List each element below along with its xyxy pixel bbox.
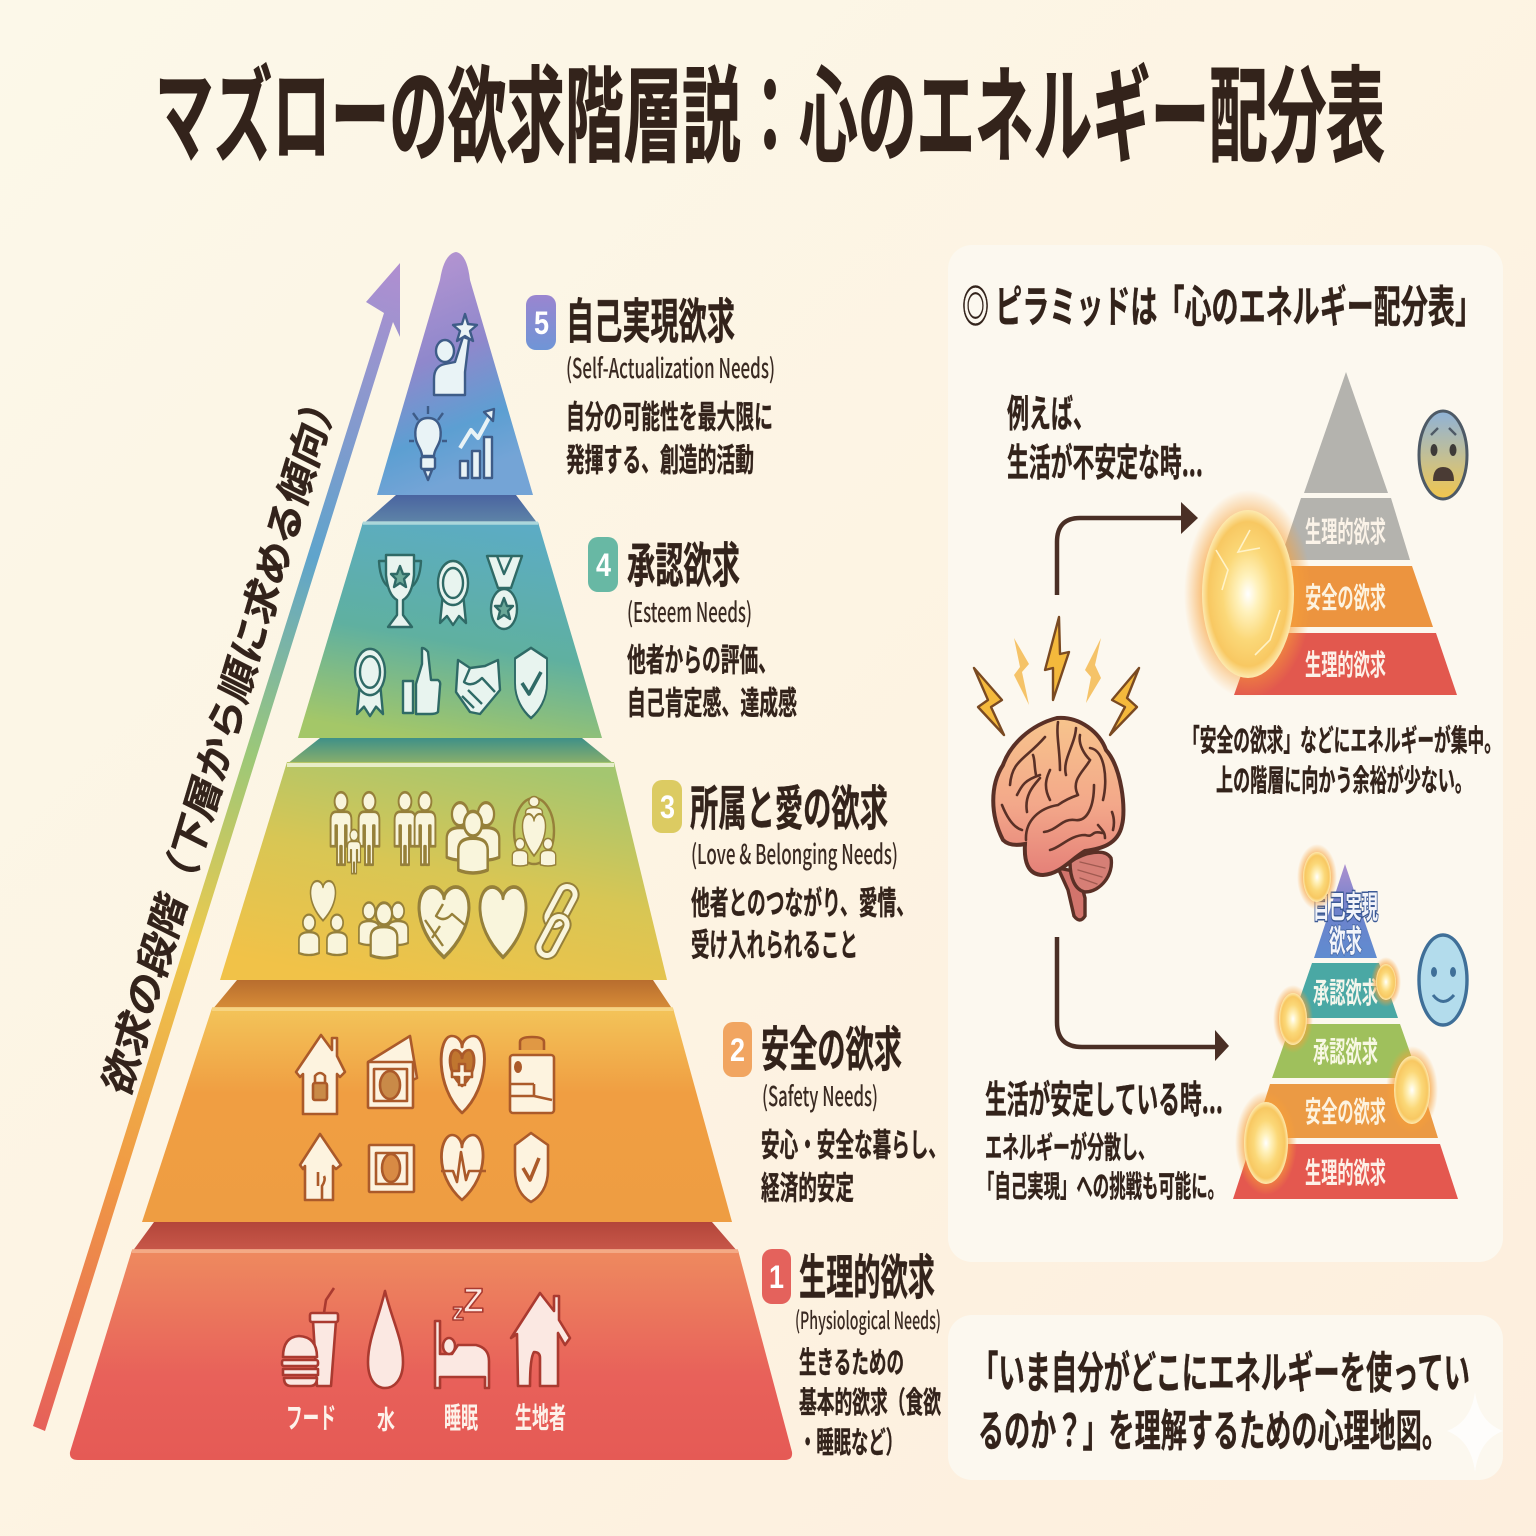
label: level 5: [526, 282, 775, 481]
icon: zzz: z: [452, 1299, 464, 1326]
arrow: needs ascending: [33, 263, 400, 1431]
chart: stable pyramid: [1233, 864, 1458, 1199]
caption: unstable: [1183, 716, 1501, 800]
label: level 3: 他者とのつながり、愛情、: [691, 878, 915, 924]
icon: chain links: [536, 884, 578, 958]
icon: couple: [395, 792, 435, 865]
chart: unstable pyramid: 安全の欲求: [1305, 582, 1386, 615]
icon: heart: [480, 887, 526, 957]
axis label: 欲求の段階（下層から順に求める傾向）: [87, 371, 349, 1103]
tier 4: esteem: [298, 495, 602, 738]
icon: group: [447, 803, 499, 873]
icon: brain: [993, 718, 1123, 920]
label: level 3: [652, 769, 915, 966]
badge 5: [526, 295, 556, 350]
icon: handshake: [456, 660, 500, 714]
label: level 2: (Safety Needs): [762, 1075, 878, 1114]
icon: rosette: [438, 561, 468, 625]
icon labels: 生地者: [515, 1402, 566, 1435]
icon: water drop: [368, 1291, 403, 1388]
text: stable life: エネルギーが分散し、: [985, 1123, 1155, 1167]
chart: stable pyramid: 承認欲求: [1313, 977, 1378, 1010]
icon: people around heart: [299, 881, 347, 955]
icon: house with lock: [296, 1035, 345, 1114]
icon: heart with cross: [441, 1036, 484, 1113]
icon: zzz: Z: [463, 1282, 484, 1320]
icon: thumbs up: [403, 648, 440, 714]
label: level 4: 他者からの評価、: [627, 635, 777, 681]
text: unstable life: 生活が不安定な時...: [1007, 432, 1203, 487]
icon: growth chart: [460, 409, 494, 478]
label: level 2: 経済的安定: [761, 1163, 854, 1209]
tier 2: safety: [142, 980, 732, 1222]
badge 3: [652, 780, 682, 833]
icon: sparkle: [1447, 1392, 1503, 1472]
label: level 1: 生理的欲求: [799, 1238, 935, 1308]
label: level 2: 安心・安全な暮らし、: [761, 1120, 947, 1166]
chart: unstable pyramid: 生理的欲求: [1305, 516, 1386, 549]
text: unstable life: 例えば、: [1007, 383, 1095, 438]
brain stem: [1058, 868, 1085, 920]
text: stable life: 生活が安定している時...: [985, 1069, 1223, 1124]
label: level 1: 生きるための: [799, 1338, 904, 1382]
icon: banknotes: [368, 1036, 417, 1108]
panel: energy allocation explanation: [948, 245, 1503, 1262]
arrow: to unstable pyramid: [1057, 502, 1198, 595]
label: level 1: ・睡眠など）: [799, 1418, 903, 1462]
tier 1: physiological: [70, 1222, 792, 1460]
chart: stable pyramid: 承認欲求: [1313, 1036, 1378, 1069]
label: level 3: (Love & Belonging Needs): [691, 833, 898, 872]
icon labels: 睡眠: [444, 1402, 478, 1435]
badge 3: 3: [660, 789, 675, 825]
label: level 1: [762, 1238, 941, 1462]
chart: stable pyramid: 欲求: [1329, 924, 1362, 959]
panel: conclusion: [948, 1315, 1503, 1480]
icon: house: [511, 1293, 570, 1386]
icon labels: 水: [377, 1405, 395, 1435]
label: level 5: 自己実現欲求: [566, 282, 735, 352]
icon labels: [286, 1402, 566, 1435]
text: stable life: [978, 1069, 1224, 1206]
label: level 5: 自分の可能性を最大限に: [566, 392, 773, 438]
cerebrum: [993, 718, 1123, 875]
energy orb: [1184, 490, 1312, 698]
icon: zzz: [452, 1282, 484, 1326]
icon: burger and drink: [282, 1288, 338, 1386]
label: level 3: 受け入れられること: [691, 920, 858, 966]
icon: person reaching for star: [434, 314, 477, 395]
icon: family: [331, 792, 379, 874]
chart: stable pyramid: 自己実現: [1313, 890, 1378, 925]
tier 3: love and belonging: [220, 738, 667, 980]
badge 2: 2: [730, 1032, 745, 1068]
chart: stable pyramid: 安全の欲求: [1305, 1096, 1386, 1129]
arrow: to stable pyramid: [1057, 937, 1229, 1061]
badge 4: 4: [596, 547, 611, 583]
icon: circle of people with heart: [512, 796, 556, 866]
icon labels: フード: [286, 1403, 336, 1435]
text: unstable life: [1007, 383, 1203, 487]
label: level 5: (Self-Actualization Needs): [566, 347, 775, 386]
label: level 5: 発揮する、創造的活動: [566, 435, 754, 481]
label: level 1: 基本的欲求（食欲: [799, 1378, 941, 1422]
text: stable life: 「自己実現」への挑戦も可能に。: [978, 1162, 1224, 1206]
icon: smiling face: [1419, 935, 1467, 1025]
icon: medal: [487, 556, 522, 629]
icon: banknote: [369, 1145, 414, 1192]
label: level 4: 自己肯定感、達成感: [627, 678, 797, 724]
label: level 4: (Esteem Needs): [627, 591, 752, 630]
icon: worried face: [1419, 411, 1467, 499]
badge 2: [723, 1022, 752, 1077]
energy orbs: [1235, 844, 1438, 1195]
icon: handshake heart: [419, 887, 469, 957]
icon: lightning bolts: [974, 617, 1139, 735]
label: level 3: 所属と愛の欲求: [690, 769, 888, 839]
icon: briefcase: [510, 1037, 554, 1113]
label: level 1: (Physiological Needs): [795, 1301, 941, 1336]
icon: rosette: [355, 649, 385, 716]
cerebellum: [1070, 852, 1111, 892]
chart: unstable pyramid: [1234, 372, 1457, 695]
label: level 2: [723, 1010, 947, 1209]
icon: house with leaf: [300, 1134, 341, 1200]
icon: trophy: [379, 555, 421, 627]
badge 1: 1: [769, 1259, 784, 1295]
icon: bed with zzz: [435, 1321, 489, 1388]
icon: light bulb: [409, 406, 447, 480]
badge 5: 5: [534, 305, 549, 341]
badge 1: [762, 1249, 791, 1304]
icon: shield: [515, 648, 547, 718]
chart: stable pyramid: 生理的欲求: [1305, 1157, 1386, 1190]
brain folds: [1002, 722, 1114, 850]
label: level 4: 承認欲求: [627, 526, 740, 596]
tier 5: self-actualization: [377, 252, 533, 495]
icon: shield with check: [515, 1133, 548, 1202]
icon: heart pulse: [441, 1135, 486, 1200]
badge 4: [588, 537, 618, 592]
pyramid: [70, 252, 792, 1460]
label: level 4: [588, 526, 797, 724]
icon: team: [359, 902, 408, 958]
label: level 2: 安全の欲求: [761, 1010, 902, 1080]
chart: unstable pyramid: 生理的欲求: [1305, 649, 1386, 682]
